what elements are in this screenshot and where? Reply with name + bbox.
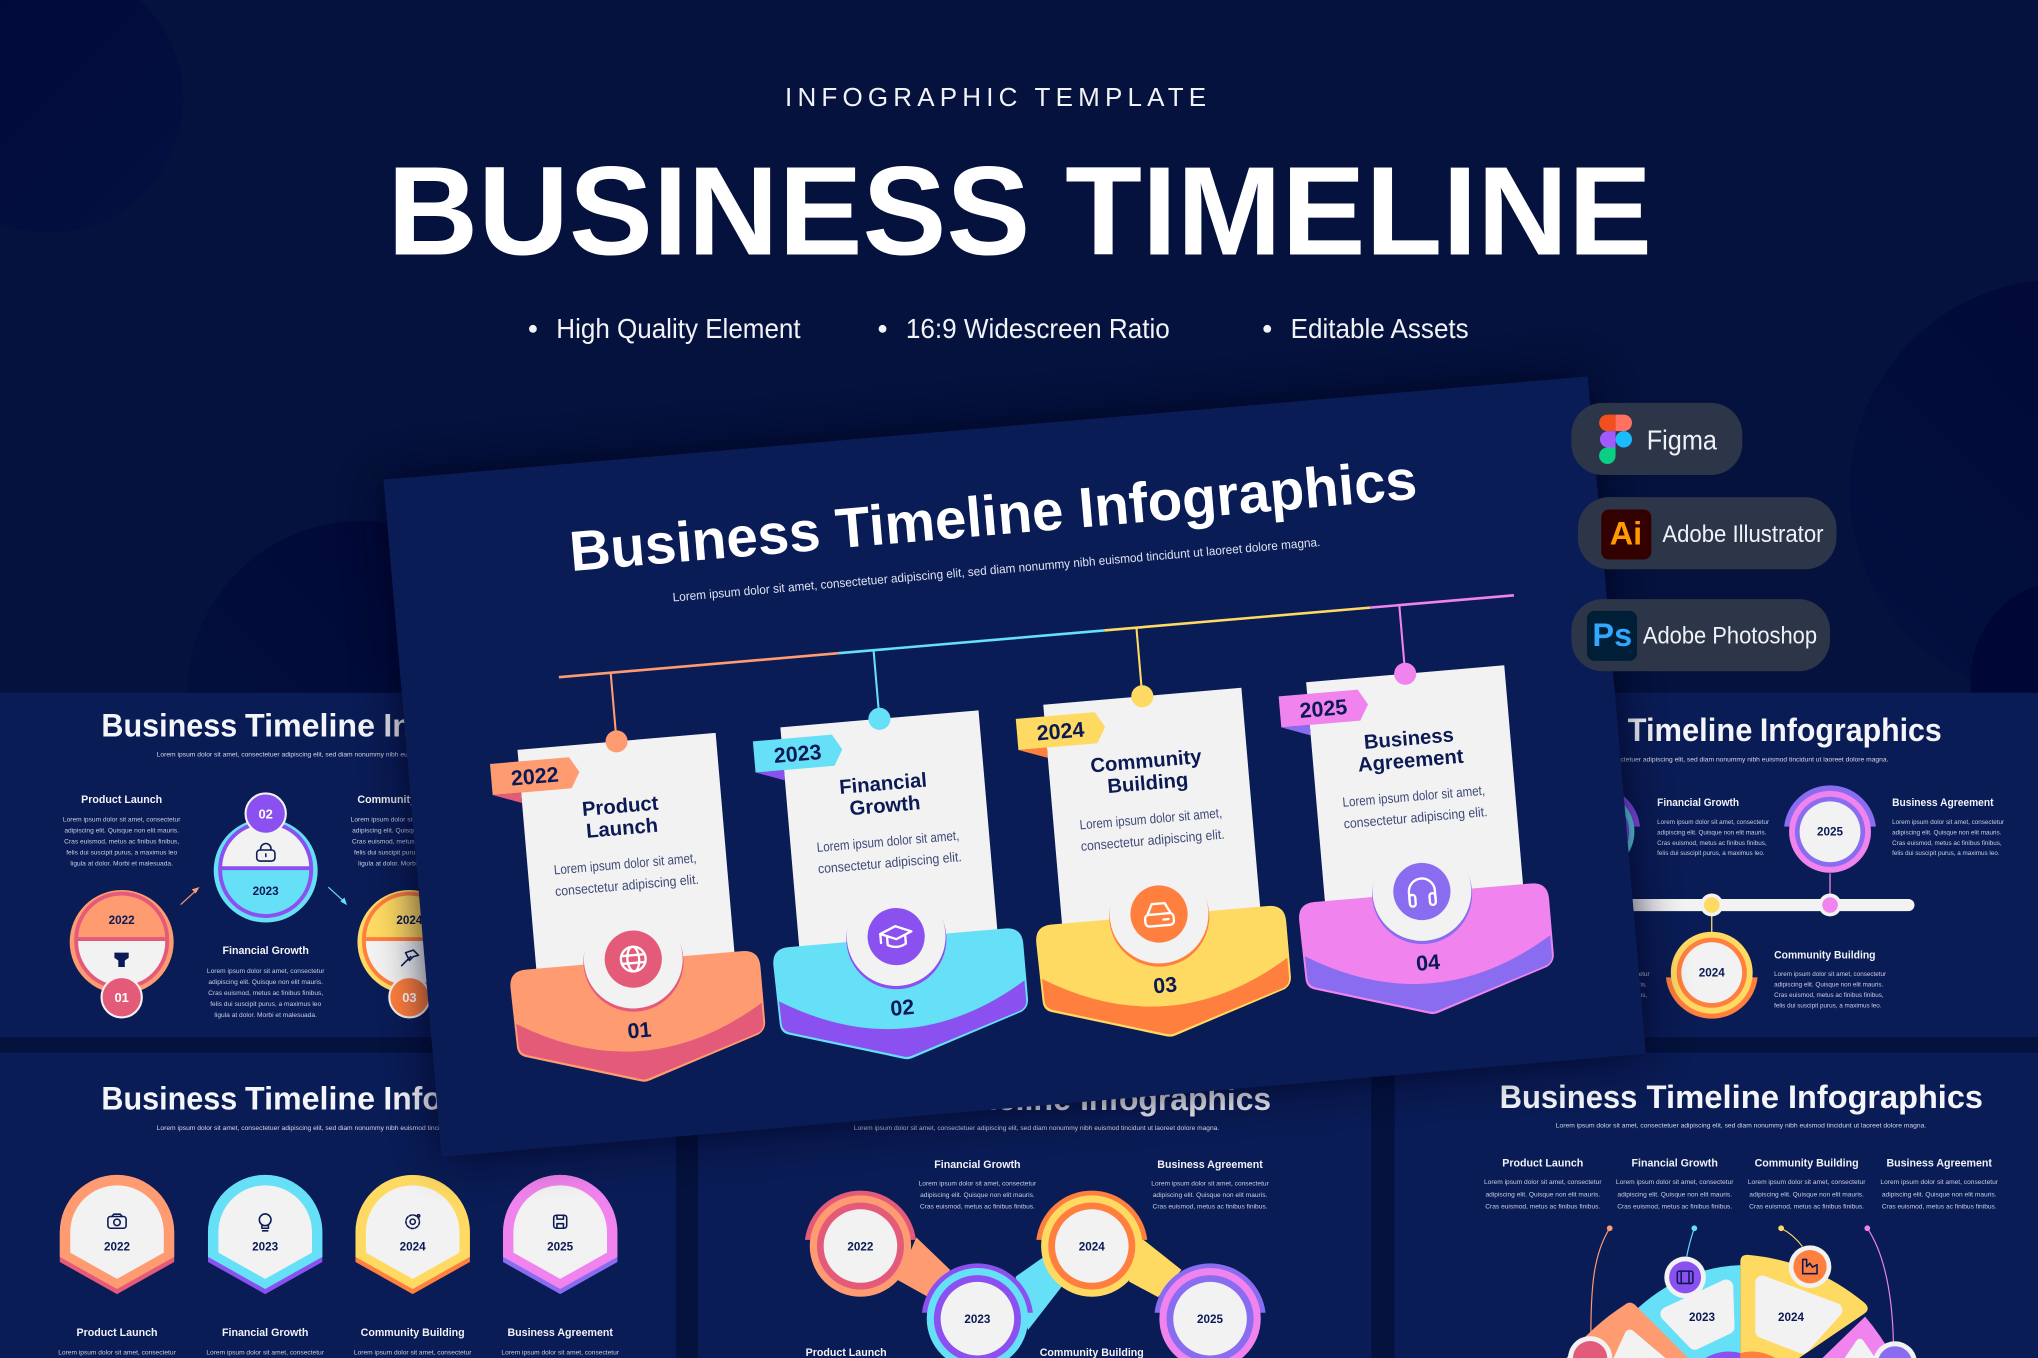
badge: adobe illustrator: Ai <box>1610 516 1642 552</box>
connectors <box>898 1237 1181 1330</box>
step: community building text: Community Building <box>357 794 461 806</box>
community building text: Lorem ipsum dolor sit amet, consectetur <box>1774 971 1886 978</box>
step: product launch text: adipiscing elit. Quisque non elit mauris. <box>64 827 179 834</box>
circle 2025 <box>1155 1263 1266 1358</box>
shield labels: Financial Growth <box>222 1327 308 1339</box>
step: community building text: adipiscing elit. Quisque non elit mauris. <box>352 827 467 834</box>
timeline line <box>559 595 1514 677</box>
column labels: adipiscing elit. Quisque non elit mauris. <box>1617 1191 1732 1198</box>
badge: adobe illustrator <box>1578 497 1837 569</box>
labels: adipiscing elit. Quisque non elit mauris. <box>920 1192 1035 1199</box>
background circle right <box>1850 279 2038 701</box>
step: 2024 circle <box>357 890 461 1017</box>
card title: Product <box>581 793 660 821</box>
fan icon orange <box>1789 1245 1831 1288</box>
shield labels <box>58 1327 620 1356</box>
product launch text partly hidden: adipiscing elit. Quisque non elit mauris. <box>1538 981 1647 988</box>
chevron: 02 <box>889 995 915 1021</box>
labels: adipiscing elit. Quisque non elit mauris. <box>1153 1192 1268 1199</box>
main slide shadow <box>383 377 1647 1157</box>
chevron <box>1030 854 1295 1047</box>
stems <box>1712 873 1830 933</box>
financial growth text: Lorem ipsum dolor sit amet, consectetur <box>1657 819 1769 826</box>
business agreement text: felis dui suscipit purus, a maximus leo. <box>1892 850 2000 857</box>
step: 2024 circle: 2024 <box>396 914 423 927</box>
step: financial growth text: ligula at dolor. Morbi et malesuada. <box>214 1012 317 1019</box>
business agreement text: Business Agreement <box>1892 797 1994 809</box>
panel: main tilted slide <box>383 376 1646 1157</box>
column labels: Cras euismod, metus ac finibus finibus. <box>1749 1204 1864 1211</box>
slide title: Business <box>797 1081 933 1117</box>
panel: slide preview bottom left: Lorem ipsum dolor sit amet, consectetuer adipiscing elit, sed diam nonummy nibh euismod tincidunt ut laoreet dolore magna. <box>157 1125 527 1132</box>
column labels <box>1484 1157 1999 1211</box>
shield labels: Product Launch <box>77 1327 158 1339</box>
step: 2024 circle: 03 <box>402 990 417 1005</box>
card title <box>838 770 930 821</box>
shield labels: Lorem ipsum dolor sit amet, consectetur <box>354 1349 472 1356</box>
step: product launch text: felis dui suscipit purus, a maximus leo <box>66 850 177 857</box>
community building text: felis dui suscipit purus, a maximus leo. <box>1774 1002 1882 1009</box>
panel: slide preview right top <box>1430 693 2038 1037</box>
slide title: Timeline <box>1628 712 1752 748</box>
timeline bar <box>1534 899 1914 911</box>
chevron: 03 <box>1152 972 1178 998</box>
panel: slide preview left top <box>0 693 728 1037</box>
card text: consectetur adipiscing elit. <box>554 872 699 899</box>
circle 2022: 2022 <box>847 1240 874 1253</box>
card 2025 business agreement <box>1272 595 1558 1025</box>
step: financial growth text: adipiscing elit. Quisque non elit mauris. <box>208 979 323 986</box>
financial growth text: felis dui suscipit purus, a maximus leo. <box>1657 850 1765 857</box>
badge: adobe illustrator: Adobe Illustrator <box>1662 521 1824 548</box>
step: product launch text: Lorem ipsum dolor sit amet, consectetur <box>63 816 181 823</box>
year tag: 2025 <box>1299 695 1348 723</box>
step: product launch text: Product Launch <box>81 794 162 806</box>
step: community building text: ligula at dolor. Morbi et malesuada. <box>358 861 461 868</box>
step: community building text: felis dui suscipit purus, a maximus leo <box>354 850 465 857</box>
card text: consectetur adipiscing elit. <box>817 849 962 876</box>
labels <box>806 1159 1270 1358</box>
shield labels: Business Agreement <box>507 1327 613 1339</box>
card title: Community <box>1089 746 1203 777</box>
year tag <box>1016 711 1106 750</box>
2024 circle <box>1666 932 1758 1019</box>
card text: consectetur adipiscing elit. <box>1343 804 1488 831</box>
year tag: 2023 <box>773 740 823 768</box>
shield labels: Community Building <box>361 1327 465 1339</box>
business agreement text: Cras euismod, metus ac finibus finibus, <box>1892 840 2002 847</box>
financial growth text: Financial Growth <box>1657 797 1739 809</box>
shield labels: Lorem ipsum dolor sit amet, consectetur <box>206 1349 325 1356</box>
badge: adobe photoshop: Adobe Photoshop <box>1643 622 1817 649</box>
column labels: Financial Growth <box>1632 1157 1718 1169</box>
panel: slide preview right top: Lorem ipsum dolor sit amet, consectetuer adipiscing elit, sed diam nonummy nibh euismod tincidunt ut laoreet dolore magna. <box>1518 757 1889 764</box>
fan icon violet <box>1873 1341 1917 1358</box>
shield labels: Lorem ipsum dolor sit amet, consectetur <box>501 1349 620 1356</box>
step: community building text <box>351 794 469 868</box>
icon: headphones <box>1391 861 1453 922</box>
labels: Lorem ipsum dolor sit amet, consectetur <box>919 1180 1037 1187</box>
fan icon pink <box>1568 1336 1612 1358</box>
column labels: adipiscing elit. Quisque non elit mauris. <box>1749 1191 1864 1198</box>
circle 2024: 2024 <box>1079 1240 1105 1253</box>
panel: slide preview bottom left <box>0 1053 676 1358</box>
slide title: Infographics <box>383 707 574 743</box>
slide title: Infographics <box>1760 712 1942 748</box>
community building text <box>1774 950 1886 1009</box>
arrow orange <box>181 887 200 905</box>
arrow cyan <box>328 887 347 905</box>
header label: INFOGRAPHIC TEMPLATE <box>785 82 1206 112</box>
slide title: Timeline <box>245 1080 375 1116</box>
chevron: 01 <box>626 1017 652 1043</box>
panel: slide preview bottom right <box>1395 1053 2038 1358</box>
card text: Lorem ipsum dolor sit amet, <box>553 850 697 878</box>
card 2022 product launch <box>483 662 769 1093</box>
icon: graduation cap <box>865 906 927 967</box>
step: 2022 circle: 01 <box>114 990 129 1005</box>
slide title <box>101 707 574 743</box>
circle 2025: 2025 <box>1197 1313 1224 1326</box>
shield 2024: 2024 <box>400 1240 426 1253</box>
circle 2023: 2023 <box>964 1313 991 1326</box>
slide title: Business <box>101 707 237 743</box>
2023 circle partly hidden <box>1548 785 1640 872</box>
main title: BUSINESS TIMELINE <box>387 141 1652 282</box>
background circle right small <box>1970 580 2038 780</box>
slide title: Infographics <box>383 1080 574 1116</box>
step: financial growth text <box>207 945 325 1019</box>
timeline dots <box>1700 894 1841 916</box>
shield 2023 <box>208 1175 322 1294</box>
shield labels: Lorem ipsum dolor sit amet, consectetur <box>58 1349 177 1356</box>
panel: slide preview bottom middle <box>698 1053 1371 1358</box>
badge: figma <box>1571 403 1742 475</box>
step: 2023 circle: 02 <box>258 806 273 821</box>
panel: slide preview bottom middle: Lorem ipsum dolor sit amet, consectetuer adipiscing elit, sed diam nonummy nibh euismod tincidunt ut laoreet dolore magna. <box>854 1125 1219 1132</box>
step: 2022 circle <box>70 890 174 1017</box>
year tag: 2024 <box>1036 718 1085 746</box>
financial growth text <box>1657 797 1769 857</box>
2024 circle: 2024 <box>1699 967 1725 980</box>
shield 2025 <box>503 1175 617 1294</box>
fan chart: 2024 <box>1778 1311 1805 1324</box>
column labels: Cras euismod, metus ac finibus finibus. <box>1882 1204 1997 1211</box>
card title: Business <box>1363 724 1455 754</box>
step: financial growth text: felis dui suscipit purus, a maximus leo <box>210 1001 321 1008</box>
icon: globe <box>602 928 664 990</box>
slide title <box>1487 712 1942 748</box>
year tag <box>753 734 844 773</box>
card text: Lorem ipsum dolor sit amet, <box>1342 783 1486 810</box>
card text: Lorem ipsum dolor sit amet, <box>816 828 960 855</box>
feature bullets: 16:9 Widescreen Ratio <box>906 313 1170 344</box>
step: 2022 circle: 2022 <box>109 914 135 927</box>
leader lines <box>1591 1225 1893 1344</box>
financial growth text: Cras euismod, metus ac finibus finibus, <box>1657 840 1767 847</box>
chevron <box>768 877 1032 1070</box>
shield 2024 <box>355 1175 470 1294</box>
slide title: Infographics <box>1788 1079 1983 1115</box>
card text <box>815 828 962 876</box>
column labels: adipiscing elit. Quisque non elit mauris. <box>1882 1191 1997 1198</box>
card text <box>1078 805 1225 854</box>
slide title: Timeline <box>941 1081 1071 1117</box>
slide title <box>797 1081 1271 1117</box>
card text <box>1341 783 1488 831</box>
column labels: Lorem ipsum dolor sit amet, consectetur <box>1880 1179 1999 1186</box>
2025 circle <box>1784 785 1876 873</box>
community building text: Community Building <box>1774 950 1876 962</box>
slide title <box>101 1080 574 1116</box>
shield 2022: 2022 <box>104 1240 130 1253</box>
year tag <box>490 756 581 795</box>
card title: Launch <box>585 815 659 843</box>
column labels: Lorem ipsum dolor sit amet, consectetur <box>1616 1179 1734 1186</box>
card 2024 community building <box>1009 617 1295 1047</box>
card title: Building <box>1107 769 1189 798</box>
slide title: Business <box>1487 712 1619 748</box>
step: product launch text: Cras euismod, metus ac finibus finibus, <box>64 839 179 846</box>
card text: consectetur adipiscing elit. <box>1080 827 1225 854</box>
community building text: Cras euismod, metus ac finibus finibus, <box>1774 992 1884 999</box>
card title <box>1089 746 1205 799</box>
labels: Lorem ipsum dolor sit amet, consectetur <box>1151 1180 1270 1187</box>
slide title: Timeline <box>1646 1079 1779 1115</box>
slide title: Infographics <box>1080 1081 1271 1117</box>
community building text: adipiscing elit. Quisque non elit mauris. <box>1774 981 1884 988</box>
panel: slide preview bottom right: Lorem ipsum dolor sit amet, consectetuer adipiscing elit, sed diam nonummy nibh euismod tincidunt ut laoreet dolore magna. <box>1556 1122 1926 1129</box>
feature bullets: Editable Assets <box>1291 313 1469 344</box>
card title <box>581 793 661 843</box>
product launch text partly hidden: Lorem ipsum dolor sit amet, consectetur <box>1538 971 1650 978</box>
labels: Cras euismod, metus ac finibus finibus. <box>1153 1204 1268 1211</box>
labels: Financial Growth <box>934 1159 1021 1171</box>
card text <box>553 850 699 899</box>
labels: Business Agreement <box>1157 1159 1263 1171</box>
card text: Lorem ipsum dolor sit amet, <box>1079 805 1223 832</box>
step: financial growth text: Financial Growth <box>223 945 309 957</box>
slide title: Timeline <box>245 707 375 743</box>
card title: Growth <box>849 792 921 820</box>
feature bullets <box>529 313 1469 344</box>
step: financial growth text: Cras euismod, metus ac finibus finibus, <box>208 990 323 997</box>
fan chart: 2023 <box>1689 1311 1715 1324</box>
column labels: Community Building <box>1755 1157 1859 1169</box>
step: 2023 circle <box>214 793 318 923</box>
card 2023 financial growth <box>746 640 1032 1070</box>
shield 2025: 2025 <box>547 1240 574 1253</box>
column labels: Business Agreement <box>1886 1157 1992 1169</box>
column labels: Product Launch <box>1502 1157 1583 1169</box>
product launch text partly hidden <box>1538 971 1650 999</box>
card title: Agreement <box>1357 746 1465 777</box>
business agreement text <box>1892 797 2004 857</box>
labels: Cras euismod, metus ac finibus finibus. <box>920 1204 1035 1211</box>
year tag <box>1279 689 1369 727</box>
slide title <box>1500 1079 1983 1115</box>
step: product launch text <box>63 794 181 868</box>
step: 2023 circle: 2023 <box>253 885 279 898</box>
column labels: Cras euismod, metus ac finibus finibus. <box>1617 1204 1732 1211</box>
year tag: 2022 <box>510 763 560 791</box>
background circle top left <box>0 0 183 233</box>
slide title: Business <box>1500 1079 1637 1115</box>
step: community building text: Cras euismod, metus ac finibus finibus, <box>352 839 467 846</box>
slide title: Business <box>101 1080 237 1116</box>
circle 2022 <box>805 1191 916 1297</box>
fan icon purple <box>1664 1257 1706 1298</box>
badge: adobe photoshop: Ps <box>1592 617 1632 653</box>
card title: Financial <box>838 770 928 799</box>
product launch text partly hidden: Cras euismod, metus ac finibus finibus, <box>1538 992 1647 999</box>
card title <box>1355 724 1465 777</box>
column labels: Lorem ipsum dolor sit amet, consectetur <box>1484 1179 1602 1186</box>
step: financial growth text: Lorem ipsum dolor sit amet, consectetur <box>207 968 325 975</box>
step: product launch text: ligula at dolor. Morbi et malesuada. <box>70 861 173 868</box>
icon: drive <box>1128 883 1190 945</box>
slide subtitle: Lorem ipsum dolor sit amet, consectetuer adipiscing elit, sed diam nonummy nibh euismod tincidunt ut laoreet dolore magna. <box>672 535 1321 605</box>
badge: figma: Figma <box>1647 425 1718 456</box>
column labels: Cras euismod, metus ac finibus finibus. <box>1485 1204 1600 1211</box>
column labels: Lorem ipsum dolor sit amet, consectetur <box>1748 1179 1866 1186</box>
2025 circle: 2025 <box>1817 826 1844 839</box>
circle 2023 <box>922 1263 1033 1358</box>
icon: figma logo <box>1599 415 1632 464</box>
business agreement text: Lorem ipsum dolor sit amet, consectetur <box>1892 819 2004 826</box>
badge: adobe photoshop <box>1571 599 1830 671</box>
shield 2022 <box>60 1175 174 1294</box>
chevron <box>505 899 769 1092</box>
chevron: 04 <box>1415 950 1441 976</box>
shield 2023: 2023 <box>252 1240 279 1253</box>
step: community building text: Lorem ipsum dolor sit amet, consectetur <box>351 816 469 823</box>
feature bullets: High Quality Element <box>556 313 801 344</box>
circle 2024 <box>1036 1191 1147 1297</box>
panel: slide preview left top: Lorem ipsum dolor sit amet, consectetuer adipiscing elit, sed diam nonummy nibh euismod tincidunt ut laoreet dolore magna. <box>157 751 527 758</box>
fan chart <box>1566 1255 1894 1358</box>
chevron <box>1293 832 1558 1025</box>
financial growth text: adipiscing elit. Quisque non elit mauris. <box>1657 829 1767 836</box>
background circle left <box>187 521 533 867</box>
slide title: Business Timeline Infographics <box>567 448 1419 583</box>
business agreement text: adipiscing elit. Quisque non elit mauris. <box>1892 829 2002 836</box>
column labels: adipiscing elit. Quisque non elit mauris. <box>1485 1191 1600 1198</box>
